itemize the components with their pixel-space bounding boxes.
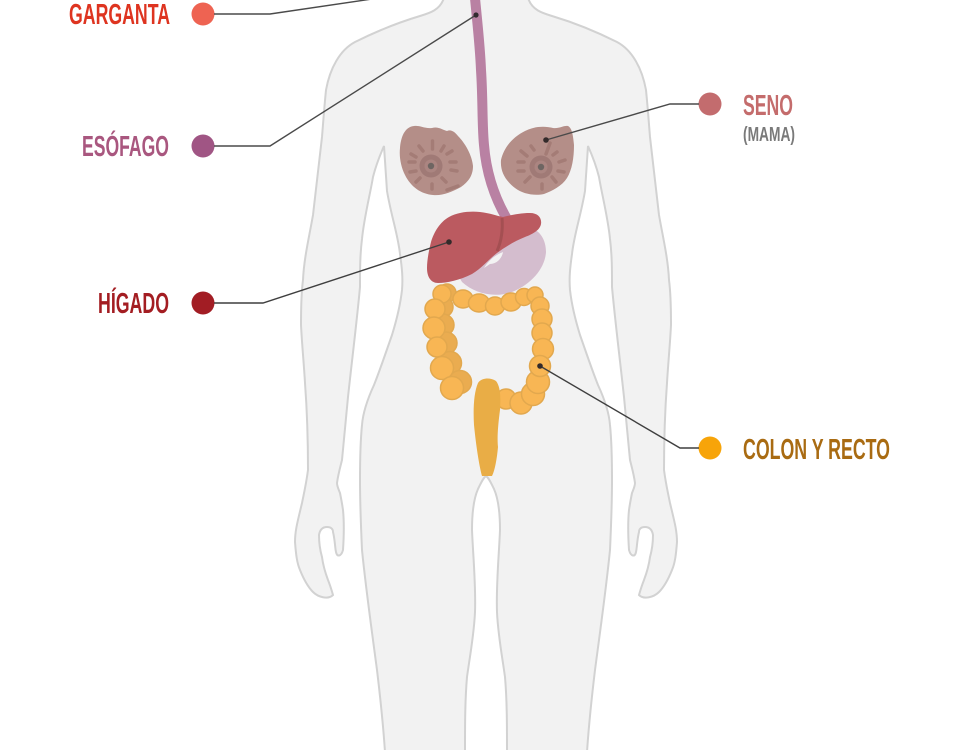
organ: left breast bbox=[400, 126, 473, 195]
organ: esophagus bbox=[475, 0, 507, 219]
leader: garganta bbox=[192, 0, 372, 26]
body silhouette bbox=[295, 0, 677, 750]
leader: seno bbox=[543, 92, 722, 143]
leader: esofago bbox=[192, 12, 479, 158]
leader: colon bbox=[537, 363, 722, 460]
organ: right breast bbox=[501, 126, 574, 195]
leader: higado bbox=[192, 239, 452, 314]
organ: colon bbox=[423, 284, 554, 414]
organ: liver bbox=[427, 212, 541, 283]
label: mama: (MAMA) bbox=[743, 124, 795, 146]
label: seno: SENO bbox=[743, 90, 793, 122]
organ: stomach bbox=[455, 228, 546, 295]
label: higado: HÍGADO bbox=[98, 286, 169, 320]
organ: stomach inner gap bbox=[484, 252, 503, 268]
organ: rectum bbox=[474, 379, 500, 476]
label: esofago: ESÓFAGO bbox=[82, 129, 169, 163]
